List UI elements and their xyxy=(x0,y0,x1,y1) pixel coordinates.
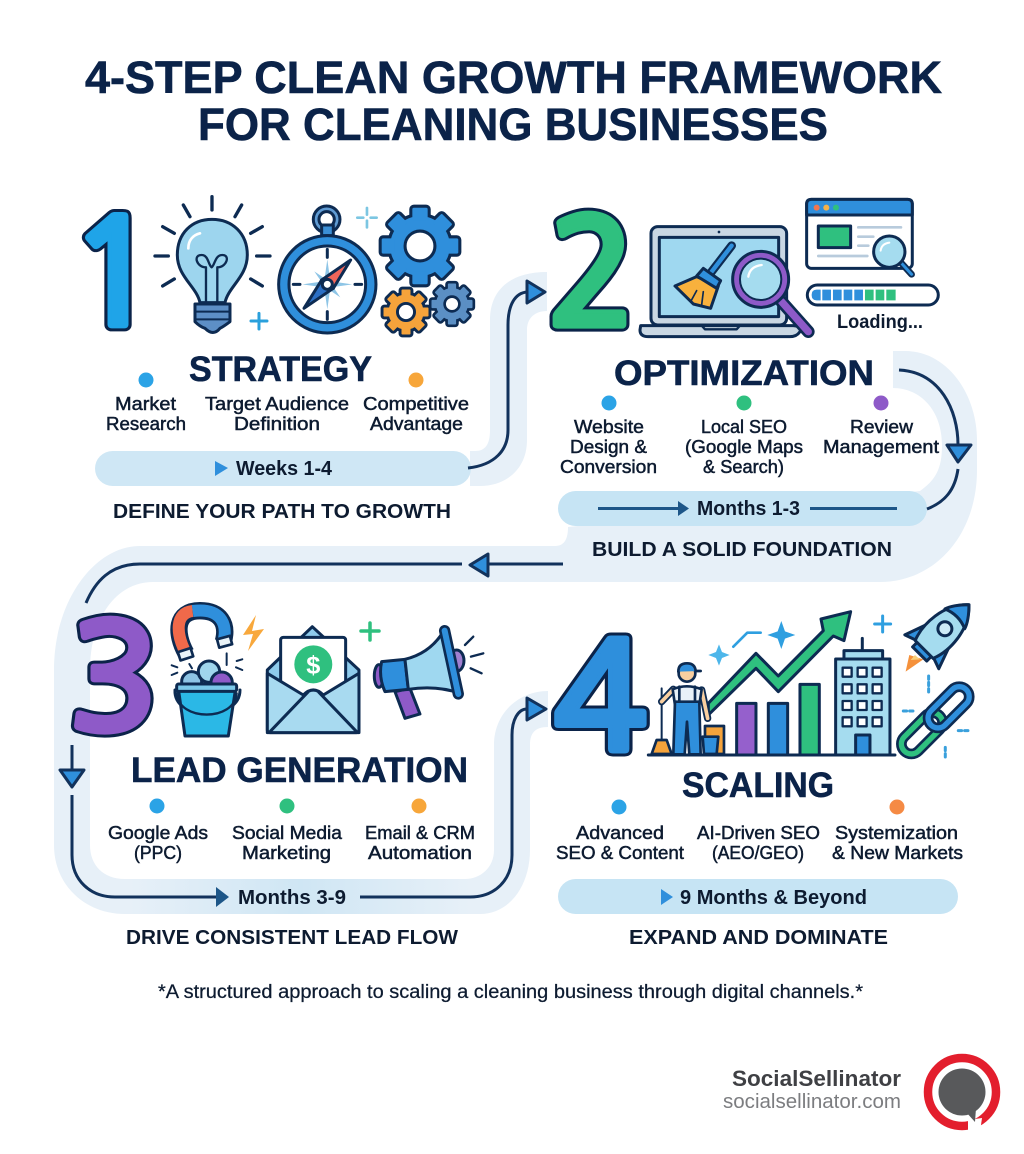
numeral 1: 1 xyxy=(67,203,162,349)
list items: Review xyxy=(850,416,914,437)
icon: chain links xyxy=(897,676,973,758)
timeline pill: Weeks 1-4 xyxy=(236,458,333,480)
icon: laptop with broom and magnifier xyxy=(640,227,808,337)
numeral 2: 2 xyxy=(546,203,638,349)
icon: rocket xyxy=(903,588,986,672)
icon: magnet and bucket xyxy=(172,610,242,736)
logo xyxy=(928,1058,996,1132)
list items: Automation xyxy=(368,842,472,863)
icon: sparkle xyxy=(357,208,377,227)
heading: OPTIMIZATION xyxy=(614,354,874,393)
loading label: Loading... xyxy=(837,312,923,333)
list items: Social Media xyxy=(232,822,343,843)
icon: orange gear xyxy=(384,290,428,334)
tagline: DRIVE CONSISTENT LEAD FLOW xyxy=(126,926,459,949)
icon: browser window xyxy=(807,199,912,274)
panel: step 1 strategy xyxy=(67,197,472,523)
list items: SEO & Content xyxy=(556,842,684,863)
list items: Google Ads xyxy=(108,822,208,843)
timeline pill: Months 1-3 xyxy=(697,498,800,520)
numeral 4: 4 xyxy=(552,626,649,774)
footnote: *A structured approach to scaling a cleaning business through digital channels.* xyxy=(158,982,864,1003)
icon: growth chart with building xyxy=(648,612,895,755)
icon: plus xyxy=(361,623,379,640)
icon: large gear xyxy=(382,208,458,284)
panel: step 2 optimization xyxy=(546,199,939,561)
icon: cleaner with broom xyxy=(652,663,724,754)
timeline label: Months 3-9 xyxy=(238,887,346,909)
list items xyxy=(556,822,963,863)
timeline pill xyxy=(95,451,471,486)
icon: small gear xyxy=(432,284,472,324)
panel: step 3 lead generation xyxy=(67,608,483,949)
panel: step 4 scaling xyxy=(552,588,986,949)
list items: (Google Maps xyxy=(685,436,803,457)
numeral 3: 3 xyxy=(67,608,161,754)
list items xyxy=(106,393,469,434)
icon: envelope: $ xyxy=(306,651,320,679)
list items: Target Audience xyxy=(205,393,349,414)
list items xyxy=(108,822,475,863)
list items: & Search) xyxy=(703,456,784,477)
list items: Marketing xyxy=(242,842,331,863)
brand name: socialsellinator.com xyxy=(723,1091,901,1113)
title: 4-STEP CLEAN GROWTH FRAMEWORK xyxy=(85,52,942,103)
icon: envelope xyxy=(267,627,359,733)
dots xyxy=(602,396,888,410)
list items: Local SEO xyxy=(701,416,787,437)
arrow: step 2 down to pill xyxy=(899,370,971,509)
brand name xyxy=(723,1066,901,1113)
list items: Market xyxy=(115,393,176,414)
icon: lightning bolt xyxy=(243,615,264,651)
list items: Website xyxy=(574,416,644,437)
dots xyxy=(150,798,426,814)
list items: Design & xyxy=(570,436,648,457)
timeline pill: 9 Months & Beyond xyxy=(680,887,867,909)
list items: Definition xyxy=(234,413,320,434)
icon: light bulb xyxy=(155,197,270,332)
numeral 4: 4 xyxy=(552,626,649,774)
heading: STRATEGY xyxy=(189,350,372,389)
tagline: EXPAND AND DOMINATE xyxy=(629,926,888,949)
icon: loading bar xyxy=(807,285,938,305)
list items: AI-Driven SEO xyxy=(697,822,820,843)
tagline: BUILD A SOLID FOUNDATION xyxy=(592,538,892,561)
list items: Advantage xyxy=(370,413,463,434)
list items: (PPC) xyxy=(134,842,182,863)
heading: LEAD GENERATION xyxy=(131,751,468,790)
list items: Conversion xyxy=(560,456,657,477)
timeline pill xyxy=(558,491,927,526)
arrow: step 2 to step 3 xyxy=(86,554,563,603)
timeline pill xyxy=(558,879,958,914)
list items: (AEO/GEO) xyxy=(712,842,804,863)
dots xyxy=(138,372,424,388)
list items: Management xyxy=(823,436,939,457)
list items: Advanced xyxy=(576,822,664,843)
connector band: step 1 to step 2 xyxy=(470,272,547,486)
dots xyxy=(612,800,904,814)
numeral 2: 2 xyxy=(546,203,638,349)
icon: compass xyxy=(279,206,376,333)
heading: SCALING xyxy=(682,766,834,805)
numeral 3: 3 xyxy=(67,608,161,754)
title: FOR CLEANING BUSINESSES xyxy=(198,99,828,150)
list items: Research xyxy=(106,413,186,434)
list items: Systemization xyxy=(835,822,958,843)
list items: Email & CRM xyxy=(365,822,475,843)
arrow: step 1 to step 2 xyxy=(468,281,545,468)
title xyxy=(85,52,942,150)
numeral 1: 1 xyxy=(67,203,162,349)
arrow: step 3 flow xyxy=(60,745,229,907)
icon: megaphone xyxy=(374,631,483,718)
list items xyxy=(560,416,939,477)
connector band: step 2 to step 3 to step 4 xyxy=(54,351,977,914)
list items: & New Markets xyxy=(832,842,963,863)
arrow: step 3 to step 4 xyxy=(360,698,546,897)
list items: Competitive xyxy=(363,393,469,414)
brand name: SocialSellinator xyxy=(732,1066,901,1091)
timeline band highlight: step 3 xyxy=(130,879,470,914)
tagline: DEFINE YOUR PATH TO GROWTH xyxy=(113,500,451,523)
